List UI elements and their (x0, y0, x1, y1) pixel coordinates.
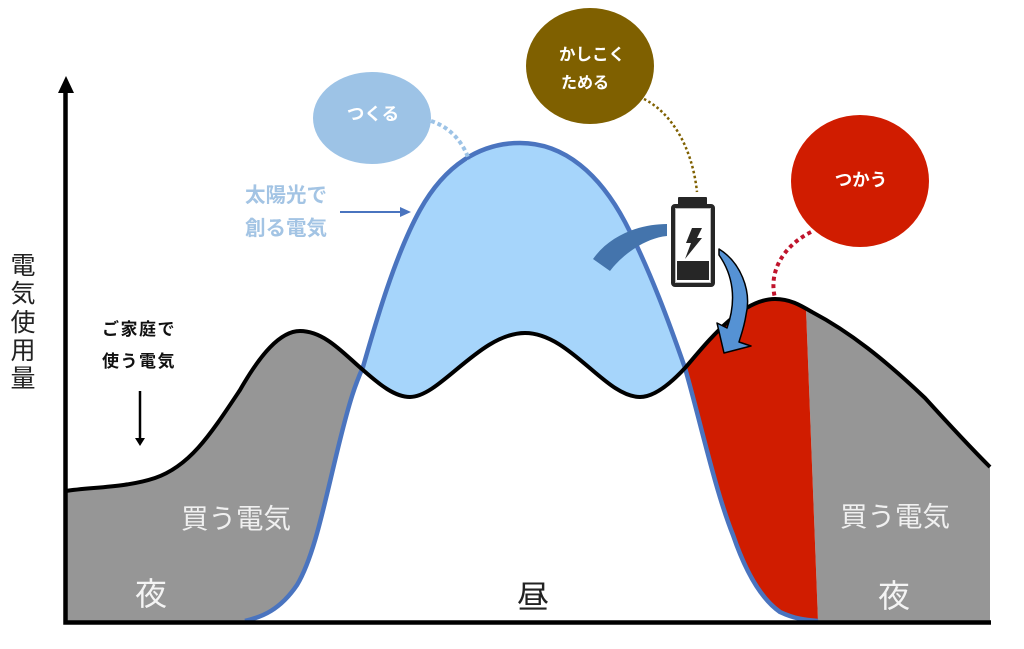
label: household electricity (102, 319, 176, 371)
dotted connector: tameru (644, 99, 697, 192)
grey area: night purchased electricity left (66, 331, 363, 621)
y axis label (10, 252, 36, 393)
bubble: tsukau: つかう (835, 170, 887, 190)
light blue area: solar generated electricity (363, 143, 685, 397)
label: buy electricity left: 買う電気 (181, 503, 291, 534)
bubble: kashikoku tameru (526, 8, 654, 124)
label: daytime: 昼 (517, 579, 549, 615)
label: buy electricity right: 買う電気 (840, 501, 950, 532)
grey area: night purchased electricity right (806, 309, 990, 621)
label: night left: 夜 (135, 576, 167, 612)
dotted connector: tsukuru (431, 121, 469, 160)
arrow: discharge to usage (717, 249, 751, 353)
y axis label: 量 (10, 365, 36, 393)
bubble: kashikoku tameru: ためる (561, 74, 609, 92)
label: solar generated electricity: 太陽光で (245, 184, 327, 207)
label: solar generated electricity: 創る電気 (245, 217, 327, 240)
dotted connector: tsukau (773, 232, 811, 298)
icon: battery (673, 197, 713, 285)
y axis label: 気 (10, 280, 36, 308)
bubble: tsukau (791, 115, 929, 247)
label: night right: 夜 (878, 578, 910, 614)
label: household electricity: ご家庭で (102, 319, 176, 339)
bubble: tsukuru (313, 72, 431, 164)
arrow: household down arrow (135, 391, 145, 446)
chart axes (58, 76, 991, 622)
bubble: kashikoku tameru: かしこく (559, 45, 625, 64)
y axis label: 電 (10, 252, 36, 280)
arrow: solar label to curve (340, 207, 411, 217)
y axis label: 使 (10, 309, 36, 337)
arrow: charge into battery (593, 224, 667, 271)
red area: self-consumed electricity (685, 299, 818, 621)
label: household electricity: 使う電気 (102, 352, 176, 371)
household usage curve (66, 299, 990, 491)
bubble: tsukuru: つくる (347, 104, 399, 124)
solar generation curve (245, 143, 818, 621)
label: solar generated electricity (245, 184, 327, 240)
y axis label: 用 (10, 337, 36, 365)
